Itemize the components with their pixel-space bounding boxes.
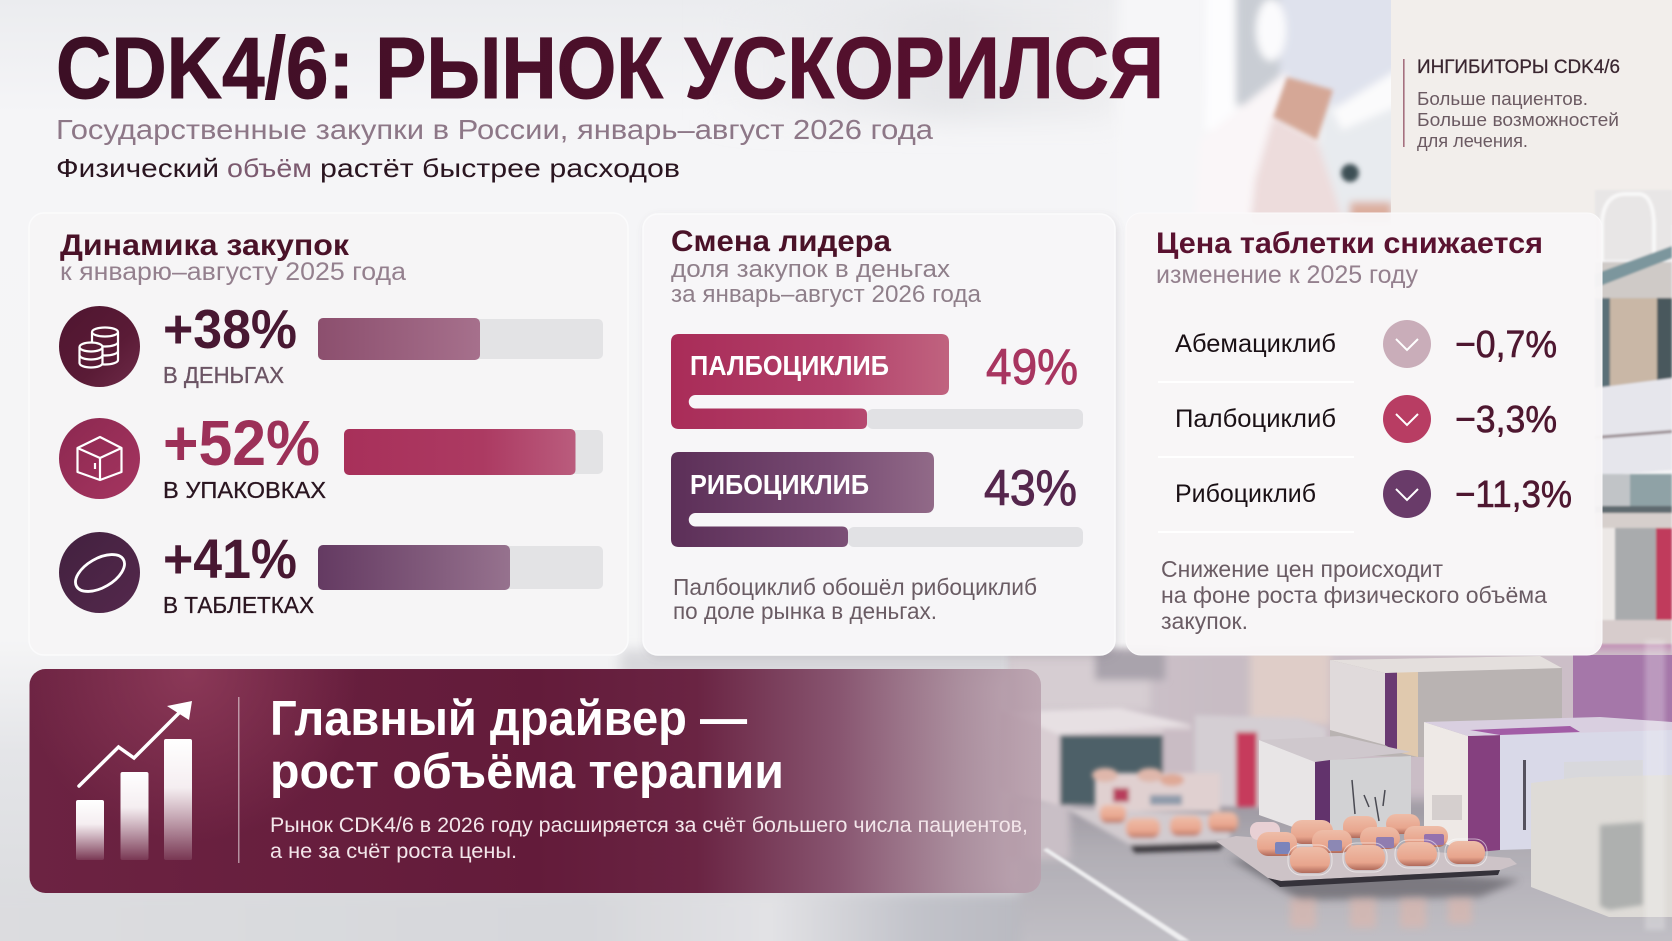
row: ribociclib: −11,3% [1455,474,1572,516]
stat: +41% in tablets: +41% [163,527,297,590]
note: price: на фоне роста физического объёма [1161,582,1547,608]
heading: price: Цена таблетки снижается [1156,227,1543,260]
note: price: Снижение цен происходит [1161,556,1443,582]
bar: ribociclib 43%: РИБОЦИКЛИБ [690,469,869,500]
title: CDK4/6: РЫНОК УСКОРИЛСЯ [56,20,1164,117]
panel: tablet price [1126,213,1602,655]
note: leader [673,574,1037,624]
top-right note: CDK4/6 inhibitors: Больше пациентов. [1417,89,1588,109]
banner text [270,814,1028,863]
stat: +41% in tablets [163,527,314,618]
right shelf with jar and boxes [1595,190,1672,670]
subheading: leader: за январь–август 2026 года [671,281,982,308]
top-right note: CDK4/6 inhibitors [1403,57,1620,151]
bar: +52% [344,429,603,475]
bar: palbociclib 49% [671,334,1083,429]
icon: growth chart with arrow [76,701,192,860]
bar: palbociclib 49%: ПАЛБОЦИКЛИБ [690,350,889,381]
banner heading: Главный драйвер — [270,692,747,746]
note: leader: Палбоциклиб обошёл рибоциклиб [673,574,1037,600]
bar: ribociclib 43%: 43% [984,460,1077,516]
bar: palbociclib 49%: 49% [986,339,1078,395]
subtitle: Государственные закупки в России, январь–август 2026 года [56,114,933,145]
cream top-right backdrop [1391,0,1672,225]
heading: leader: Смена лидера [671,225,891,258]
front blister pack with tablets [1216,814,1520,928]
subheading: leader: доля закупок в деньгах [671,256,950,283]
package boxes [1000,640,1672,930]
row: palbociclib: −3,3% [1455,399,1557,441]
subheading: leader [671,256,982,308]
stat: +52% in packages: В УПАКОВКАХ [163,477,326,503]
banner: main driver [30,669,1041,893]
stat: +38% in money [163,298,297,388]
bar: ribociclib 43% [671,452,1083,547]
row: ribociclib: Рибоциклиб [1175,480,1316,508]
heading: dynamics: Динамика закупок [60,229,350,262]
lower shelf wall and counter [0,893,1080,941]
stat: +41% in tablets: В ТАБЛЕТКАХ [163,592,314,618]
panel: purchase dynamics [29,213,628,655]
row: abemaciclib: Абемациклиб [1175,330,1336,358]
top-right note: CDK4/6 inhibitors: для лечения. [1417,131,1528,151]
icon: tablet [59,532,140,613]
row: abemaciclib [1158,320,1557,383]
banner text: а не за счёт роста цены. [270,840,517,863]
tagline: объём [227,153,312,183]
bar: +41% [318,545,603,590]
bar: +38% [318,318,603,360]
stat: +38% in money: В ДЕНЬГАХ [163,362,284,388]
banner text: Рынок CDK4/6 в 2026 году расширяется за счёт большего числа пациентов, [270,814,1028,837]
tagline: Физический [56,153,219,183]
top-right note: CDK4/6 inhibitors: ИНГИБИТОРЫ CDK4/6 [1417,57,1620,78]
stat: +52% in packages: +52% [163,407,320,479]
panel: leader change [643,214,1115,655]
note: leader: по доле рынка в деньгах. [673,598,937,624]
note: price [1161,556,1547,634]
icon: coins [59,306,140,387]
row: palbociclib: Палбоциклиб [1175,405,1336,433]
icon: box [59,418,140,499]
banner heading: рост объёма терапии [270,745,784,799]
row: abemaciclib: −0,7% [1455,324,1557,366]
subheading: price: изменение к 2025 году [1156,261,1418,289]
top-right note: CDK4/6 inhibitors: Больше возможностей [1417,110,1619,130]
row: ribociclib [1158,470,1572,533]
tagline [56,153,680,183]
row: palbociclib [1158,395,1557,458]
banner heading [270,692,784,799]
back blister pack [1065,768,1238,853]
subheading: dynamics: к январю–августу 2025 года [60,258,406,286]
note: price: закупок. [1161,608,1248,634]
stat: +38% in money: +38% [163,298,297,360]
tagline: растёт быстрее расходов [320,153,680,183]
